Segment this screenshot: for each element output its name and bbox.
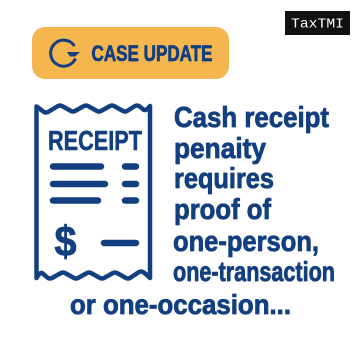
receipt line items: [53, 166, 136, 243]
headline text: [70, 102, 335, 320]
receipt heading: RECEIPT: [48, 125, 142, 156]
headline text: one-person,: [173, 226, 319, 258]
icon: receipt: [36, 106, 150, 278]
headline text: proof of: [174, 194, 271, 226]
badge: case update: [32, 27, 229, 79]
icon: refresh arrow: [51, 40, 80, 66]
headline text: or one-occasion...: [70, 289, 291, 320]
headline text: Cash receipt: [174, 102, 329, 134]
headline text: penaity: [174, 133, 266, 165]
badge label: CASE UPDATE: [92, 41, 212, 66]
receipt outline: [36, 106, 150, 278]
watermark: TaxTMI: TaxTMI: [291, 16, 344, 32]
headline text: requires: [174, 163, 274, 195]
watermark: TaxTMI: [285, 11, 350, 35]
dollar sign: $: [54, 218, 77, 266]
